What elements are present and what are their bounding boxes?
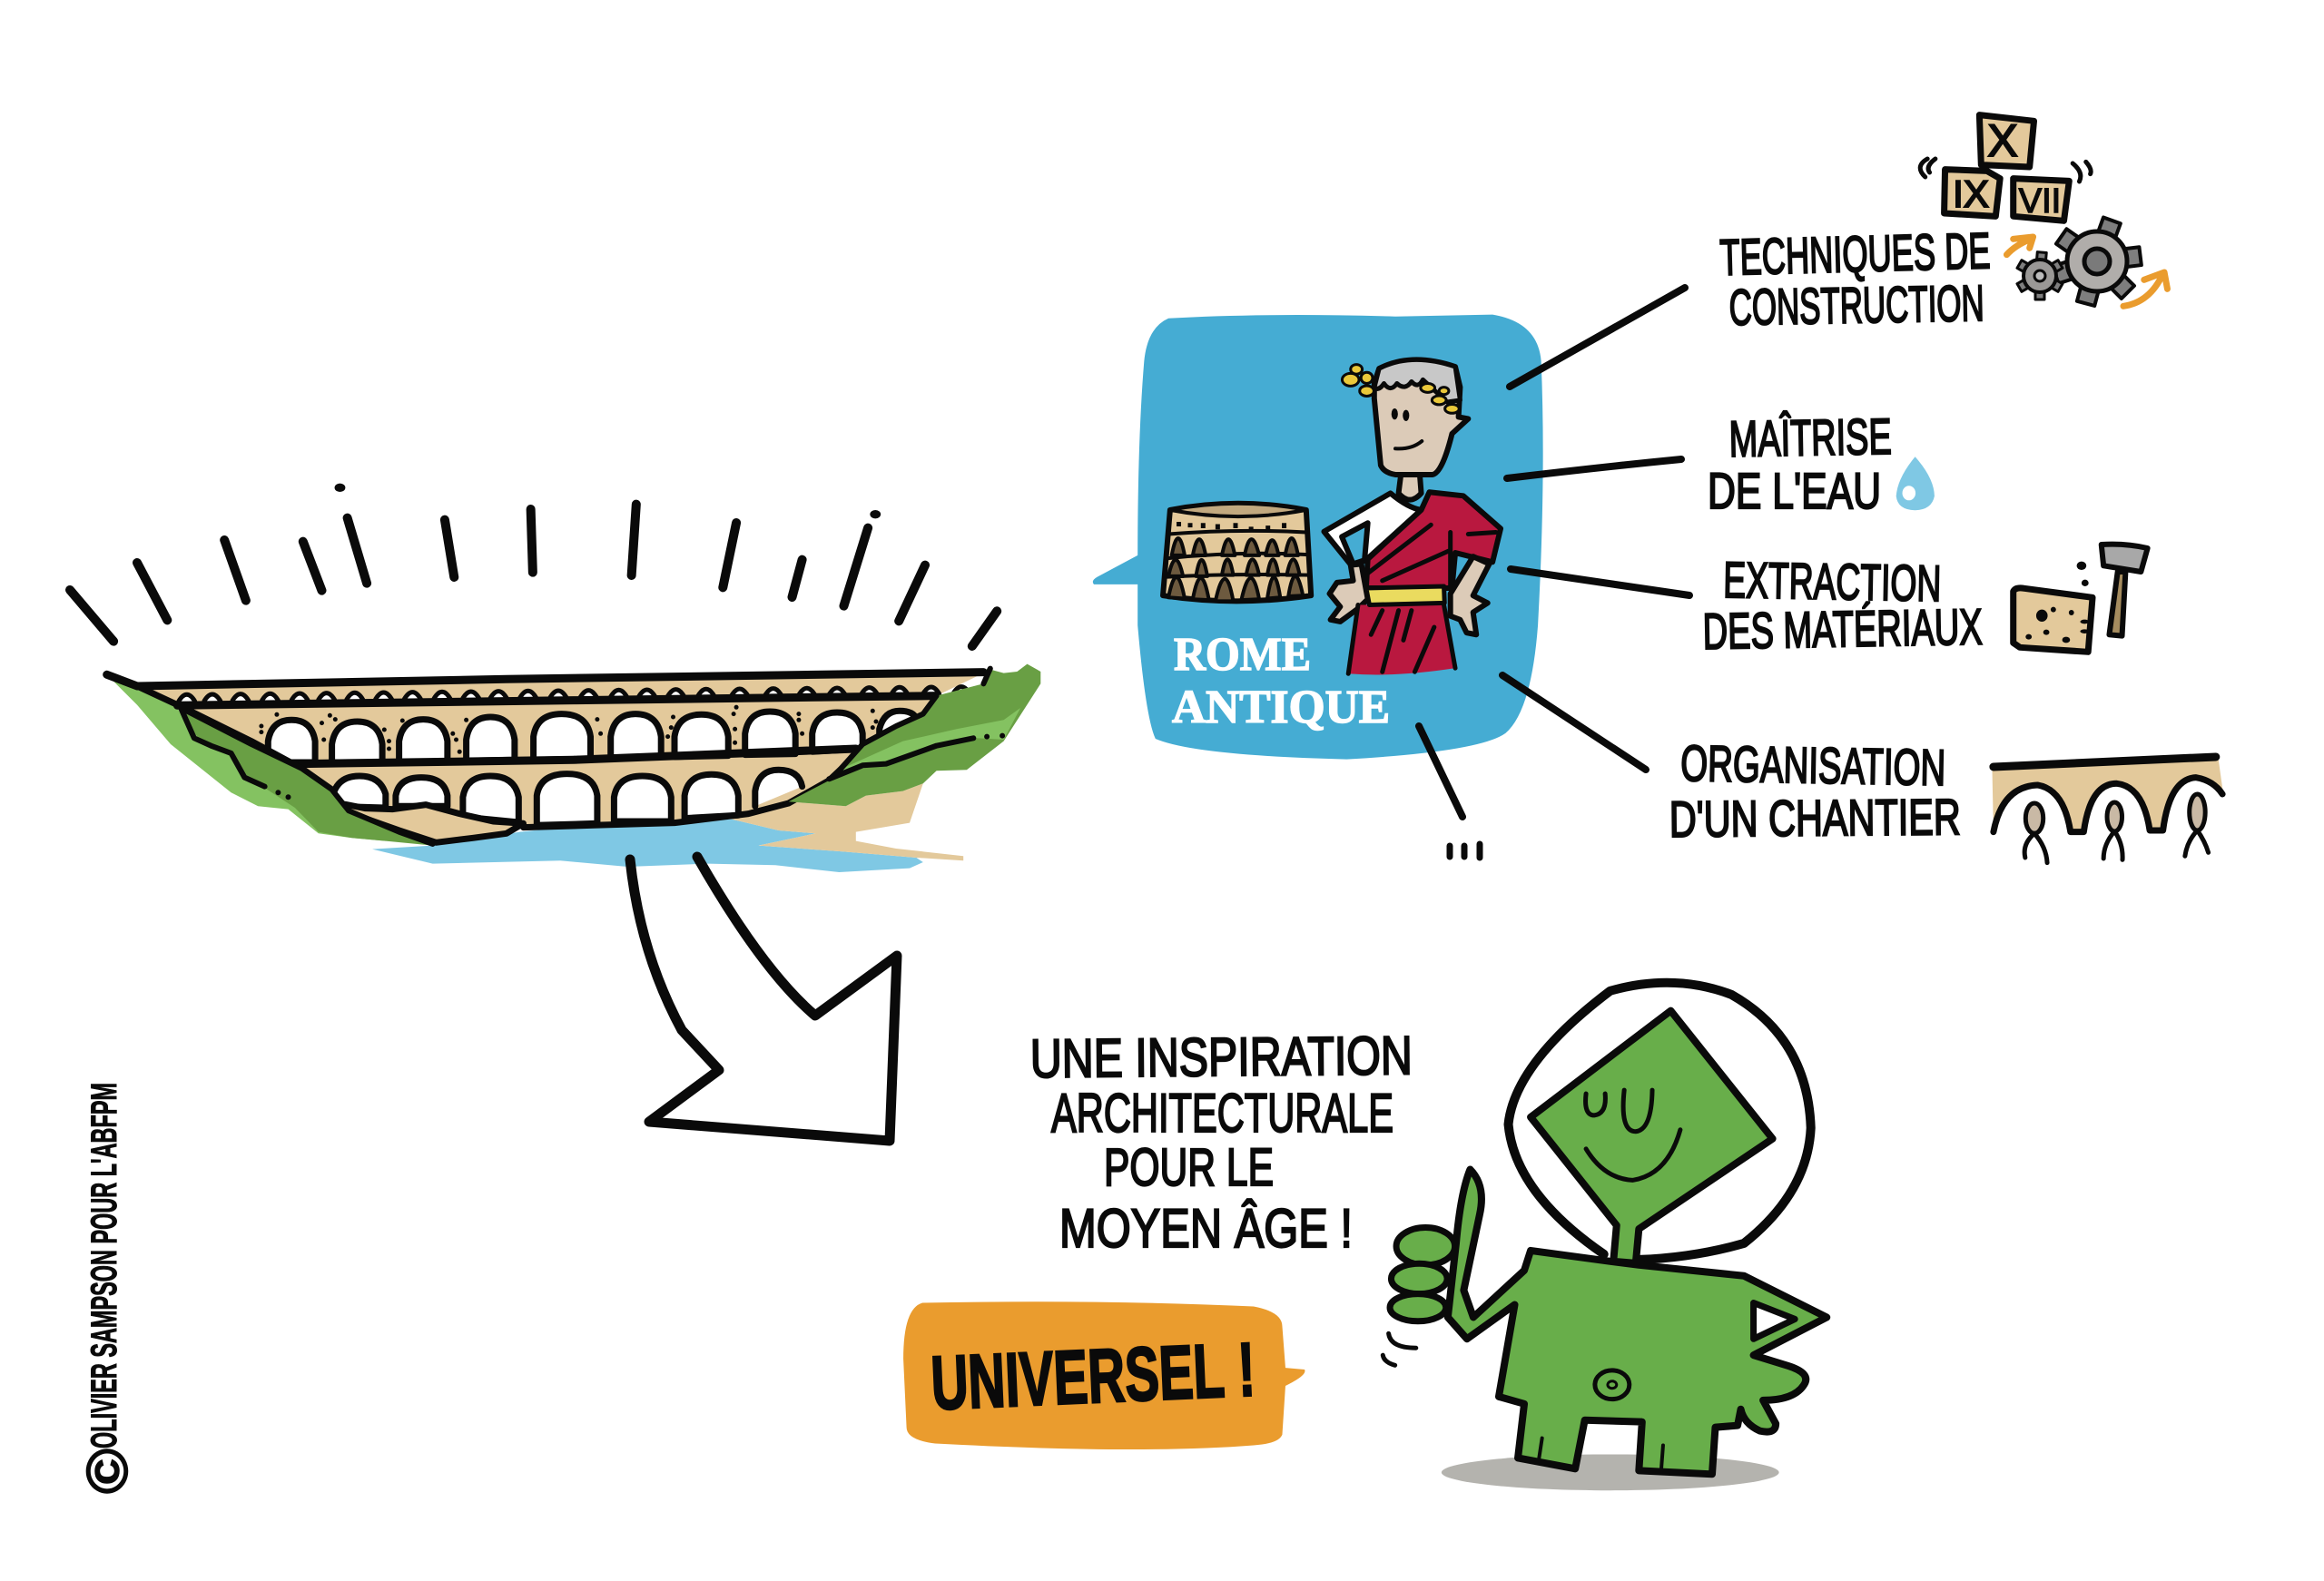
text: une inspiration architecturale pour le moyen âge <box>1030 1025 1413 1259</box>
yellow belt <box>1366 586 1444 604</box>
bridge outlines <box>107 673 983 764</box>
heading: Rome antique: ANTIQUE <box>1172 682 1390 733</box>
top tier small arches <box>179 687 970 705</box>
text: extraction des matériaux: EXTRACTION <box>1723 551 1942 612</box>
face <box>1392 408 1398 419</box>
legs seam and navel <box>1539 1439 1663 1470</box>
text: une inspiration architecturale pour le moyen âge: UNE INSPIRATION <box>1030 1025 1413 1089</box>
text: une inspiration architecturale pour le moyen âge: POUR LE <box>1104 1138 1274 1197</box>
text: maîtrise de l'eau <box>1708 408 1892 519</box>
radiating rays above the aqueduct <box>70 484 997 646</box>
motion marks <box>1383 1333 1416 1365</box>
right hill light green strip <box>836 708 1020 774</box>
head <box>1374 359 1468 475</box>
red skirt <box>1348 604 1455 674</box>
face <box>1586 1090 1680 1180</box>
text: organisation d'un chantier: ORGANISATION <box>1680 734 1946 796</box>
head halo outline <box>1509 983 1811 1260</box>
text: techniques de construction: TECHNIQUES DE <box>1719 221 1991 286</box>
left forearm and hand <box>1330 564 1368 622</box>
text: une inspiration architecturale pour le moyen âge: ARCHITECTURALE <box>1051 1083 1393 1144</box>
left hill dark green <box>181 708 433 846</box>
heading: Rome antique <box>1172 629 1390 733</box>
small gear teeth <box>2017 252 2063 300</box>
credit line: © <box>74 1448 140 1494</box>
fingers <box>1390 1227 1455 1321</box>
icon: Roman numeral blocks: X <box>1987 115 2018 166</box>
kite-shaped head <box>1531 1011 1773 1263</box>
rock outline at foot of arches <box>339 803 523 842</box>
left hill light green <box>107 674 433 846</box>
body and arms <box>1448 1170 1827 1474</box>
ellipsis dots under last connector <box>1450 844 1480 858</box>
stone speckles <box>261 707 876 751</box>
lower tier arches <box>333 770 803 825</box>
icon: Roman numeral blocks <box>1920 115 2091 221</box>
grey hair <box>1374 359 1460 402</box>
icon: gears with orange arrows <box>2006 217 2167 306</box>
text: une inspiration architecturale pour le moyen âge: MOYEN ÂGE ! <box>1059 1198 1353 1259</box>
white tunic <box>1324 493 1422 567</box>
hill contour lines <box>181 669 1002 844</box>
green mascot character with thumb up <box>1383 983 1827 1490</box>
hip cutout <box>1754 1303 1795 1339</box>
icon: Roman numeral blocks: IX <box>1953 172 1989 215</box>
laurel wreath <box>1342 365 1459 413</box>
credit line: OLIVIER SAMPSON POUR L'ABFPM <box>84 1083 124 1448</box>
icon: Roman numeral blocks: VII <box>2019 182 2061 221</box>
river water <box>372 820 923 872</box>
right forearm and hand <box>1451 556 1490 634</box>
orange rotation arrows <box>2006 237 2167 306</box>
icon: colosseum <box>1163 504 1311 601</box>
left arm opening <box>1342 523 1368 564</box>
bridge stone body <box>137 673 983 841</box>
text: extraction des matériaux: DES MATÉRIAUX <box>1702 598 1983 660</box>
sand bank <box>732 783 963 860</box>
text: organisation d'un chantier: D'UN CHANTIER <box>1669 788 1961 848</box>
credit line <box>74 1083 140 1494</box>
middle tier arches <box>268 711 916 762</box>
text: techniques de construction <box>1719 221 1991 336</box>
big gear teeth <box>2053 217 2142 306</box>
ground shadow <box>1442 1454 1779 1490</box>
aqueduct: Pont du Gard <box>107 664 1040 872</box>
small gear disc <box>2024 260 2056 292</box>
callout: Universel badge <box>903 1301 1305 1449</box>
panel: Rome antique speech bubble <box>1093 315 1543 760</box>
icon: water drop <box>1896 457 1935 510</box>
red toga <box>1366 492 1501 588</box>
callout: Universel badge: UNIVERSEL ! <box>930 1327 1256 1426</box>
icon: arches with workers <box>1992 756 2223 863</box>
connector lines from bubble <box>1419 288 1689 817</box>
big gear disc <box>2067 231 2127 291</box>
text: techniques de construction: CONSTRUCTION <box>1728 274 1984 336</box>
big hollow arrow <box>630 857 897 1141</box>
text: extraction des matériaux <box>1702 551 1983 660</box>
text: maîtrise de l'eau: DE L'EAU <box>1708 462 1881 519</box>
right hill dark green <box>789 664 1040 806</box>
neck <box>1399 473 1422 500</box>
text: organisation d'un chantier <box>1669 734 1961 848</box>
icon: Roman emperor <box>1324 359 1501 674</box>
heading: Rome antique: ROME <box>1174 629 1311 681</box>
icon: stone block and hammer <box>2014 545 2148 652</box>
text: maîtrise de l'eau: MAÎTRISE <box>1728 408 1892 467</box>
